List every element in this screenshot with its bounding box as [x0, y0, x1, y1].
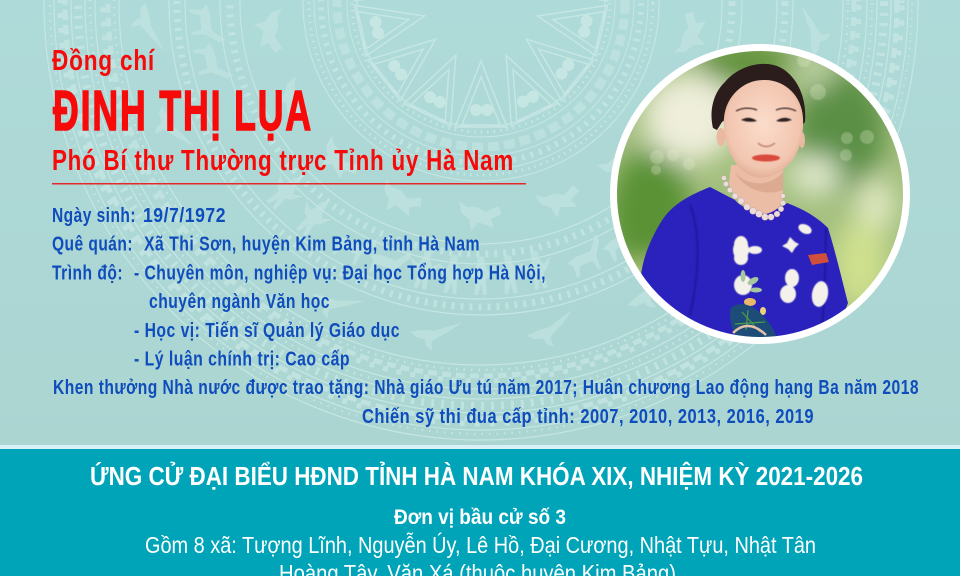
text block: biography: 19/7/1972 [143, 205, 226, 227]
hair [712, 64, 805, 130]
delegate badge [808, 253, 829, 265]
text block: biography: Trình độ: [52, 262, 123, 284]
communes line 1: Gồm 8 xã: Tượng Lĩnh, Nguyễn Úy, Lê Hồ, Đại Cương, Nhật Tựu, Nhật Tân [145, 532, 816, 558]
portrait photo in circular frame [608, 42, 910, 350]
text block: biography: - Lý luận chính trị: Cao cấp [134, 348, 350, 370]
ear left [716, 128, 726, 146]
bronze drum background pattern [44, 0, 918, 440]
text block: biography: - Học vị: Tiến sĩ Quản lý Giáo dục [134, 320, 400, 342]
eyes [741, 118, 792, 122]
subtitle: position: Phó Bí thư Thường trực Tỉnh ủy Hà Nam [52, 145, 514, 177]
title: Đồng chí: Đồng chí [52, 45, 155, 77]
text block: biography [52, 205, 919, 428]
face [724, 80, 803, 178]
light divider strip [0, 445, 960, 449]
text block: biography: Chiến sỹ thi đua cấp tỉnh: 2007, 2010, 2013, 2016, 2019 [362, 406, 814, 428]
leaves on dress [740, 270, 762, 292]
eyebrows [736, 108, 796, 111]
text block: biography: Ngày sinh: [52, 205, 136, 227]
embroidered lotus leaf [730, 304, 776, 338]
text block: biography: Xã Thi Sơn, huyện Kim Bảng, tỉnh Hà Nam [144, 234, 480, 256]
bokeh highlights [650, 53, 874, 175]
constituency label: Đơn vị bầu cử số 3 [394, 506, 566, 529]
title: candidate name: ĐINH THỊ LỤA [53, 79, 313, 143]
text block: biography: - Chuyên môn, nghiệp vụ: Đại học Tổng hợp Hà Nội, [134, 262, 546, 284]
red rule under heading [52, 183, 526, 184]
ear right [799, 132, 805, 148]
background panel [0, 0, 960, 446]
nose [758, 143, 775, 146]
neck [729, 165, 783, 214]
text block: biography: chuyên ngành Văn học [149, 291, 330, 313]
embroidered flowers [733, 222, 830, 308]
election heading: ỨNG CỬ ĐẠI BIỂU HĐND TỈNH HÀ NAM KHÓA XIX, NHIỆM KỲ 2021-2026 [90, 460, 863, 491]
lips [752, 154, 780, 162]
panel: election information [0, 449, 960, 576]
dress [641, 187, 848, 350]
text block: biography: Quê quán: [52, 234, 133, 256]
pearl necklace [722, 176, 786, 220]
